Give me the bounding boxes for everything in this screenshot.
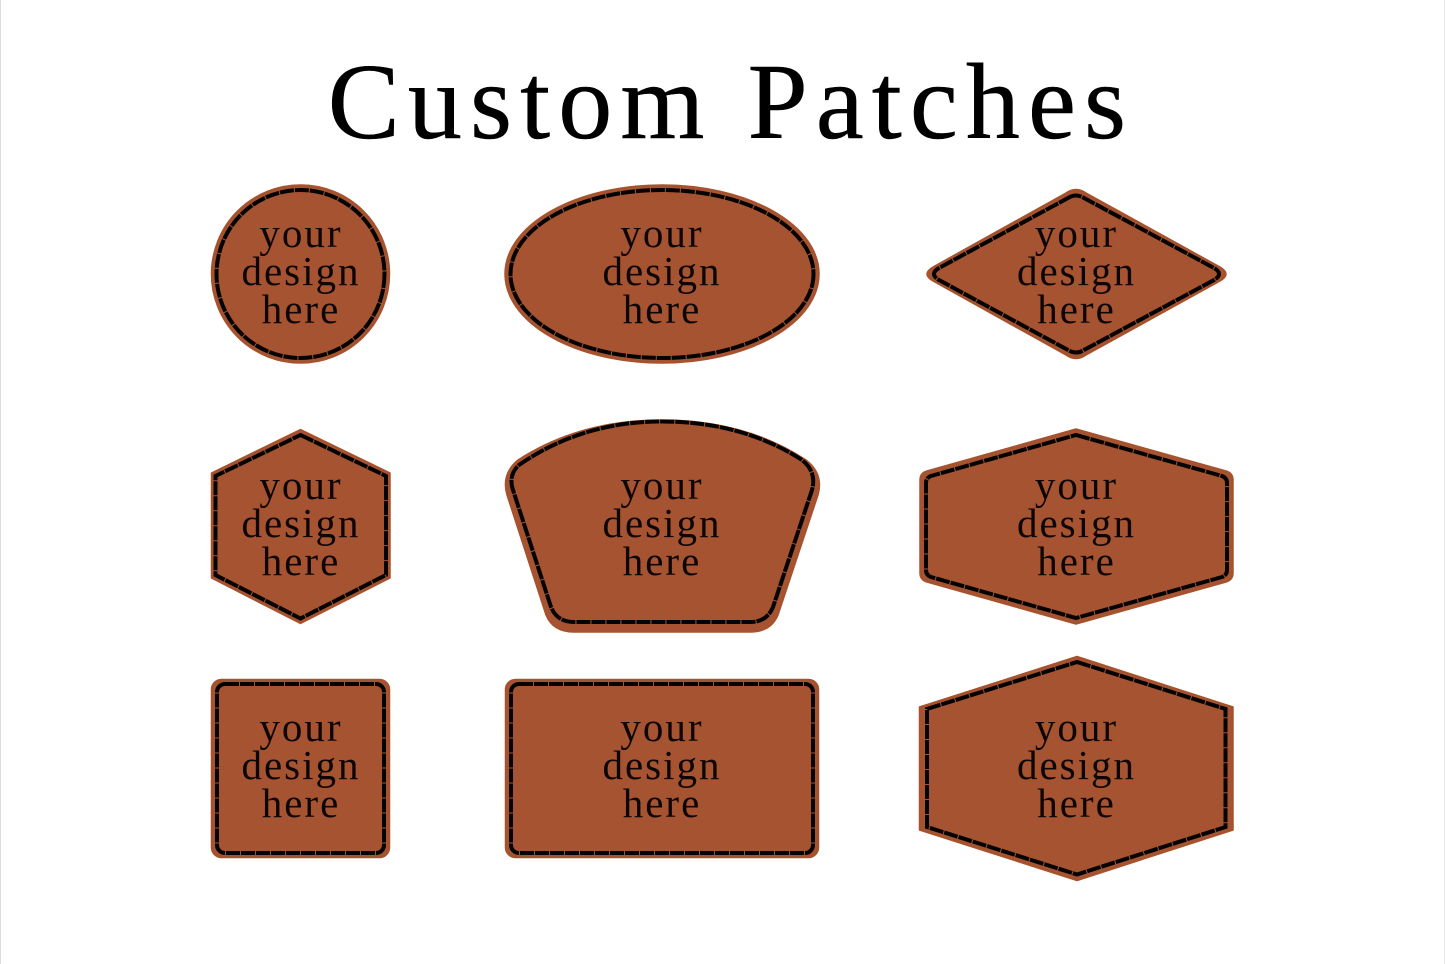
- patch: wide hexagon: [920, 429, 1233, 624]
- patch text: diamond: your: [1035, 210, 1118, 256]
- patch text: rounded rectangle: your: [620, 704, 704, 750]
- patch text: cap shield: design: [602, 500, 722, 546]
- patch text: oval: here: [623, 286, 701, 332]
- patch text: rounded rectangle: design: [602, 742, 722, 788]
- patch text: diamond: design: [1017, 248, 1136, 294]
- patch text: wide hexagon: design: [1017, 500, 1136, 546]
- patch text: rounded square: your: [259, 704, 343, 750]
- patch: rounded rectangle: [506, 680, 818, 858]
- patch text: cap shield: here: [623, 538, 701, 584]
- patch text: oval: design: [602, 248, 722, 294]
- patch: diamond: [927, 190, 1226, 358]
- patch: rounded square: [212, 680, 390, 858]
- patch text: oval: your: [620, 210, 704, 256]
- patch text: circle: your: [259, 210, 343, 256]
- patch text: wide hexagon: here: [1037, 538, 1116, 584]
- patch text: tall wide hexagon: design: [1017, 742, 1136, 788]
- patch text: tall wide hexagon: here: [1037, 780, 1116, 826]
- patch text: circle: here: [262, 286, 340, 332]
- patch text: tall wide hexagon: your: [1035, 704, 1118, 750]
- patch text: rounded square: here: [262, 780, 340, 826]
- patch: circle: [212, 185, 390, 363]
- patch text: rounded square: design: [241, 742, 361, 788]
- patch text: rounded rectangle: here: [623, 780, 701, 826]
- patch text: cap shield: your: [620, 462, 704, 508]
- patch: oval: [505, 185, 819, 363]
- patch text: hexagon: here: [262, 538, 340, 584]
- patch text: hexagon: your: [259, 462, 343, 508]
- patch: tall wide hexagon: [920, 656, 1233, 880]
- title: Custom Patches: [328, 43, 1134, 162]
- patch text: circle: design: [241, 248, 361, 294]
- patch text: hexagon: design: [241, 500, 361, 546]
- patch: cap shield: [505, 420, 820, 632]
- patch text: wide hexagon: your: [1035, 462, 1118, 508]
- patch: hexagon: [212, 430, 390, 624]
- patch text: diamond: here: [1037, 286, 1116, 332]
